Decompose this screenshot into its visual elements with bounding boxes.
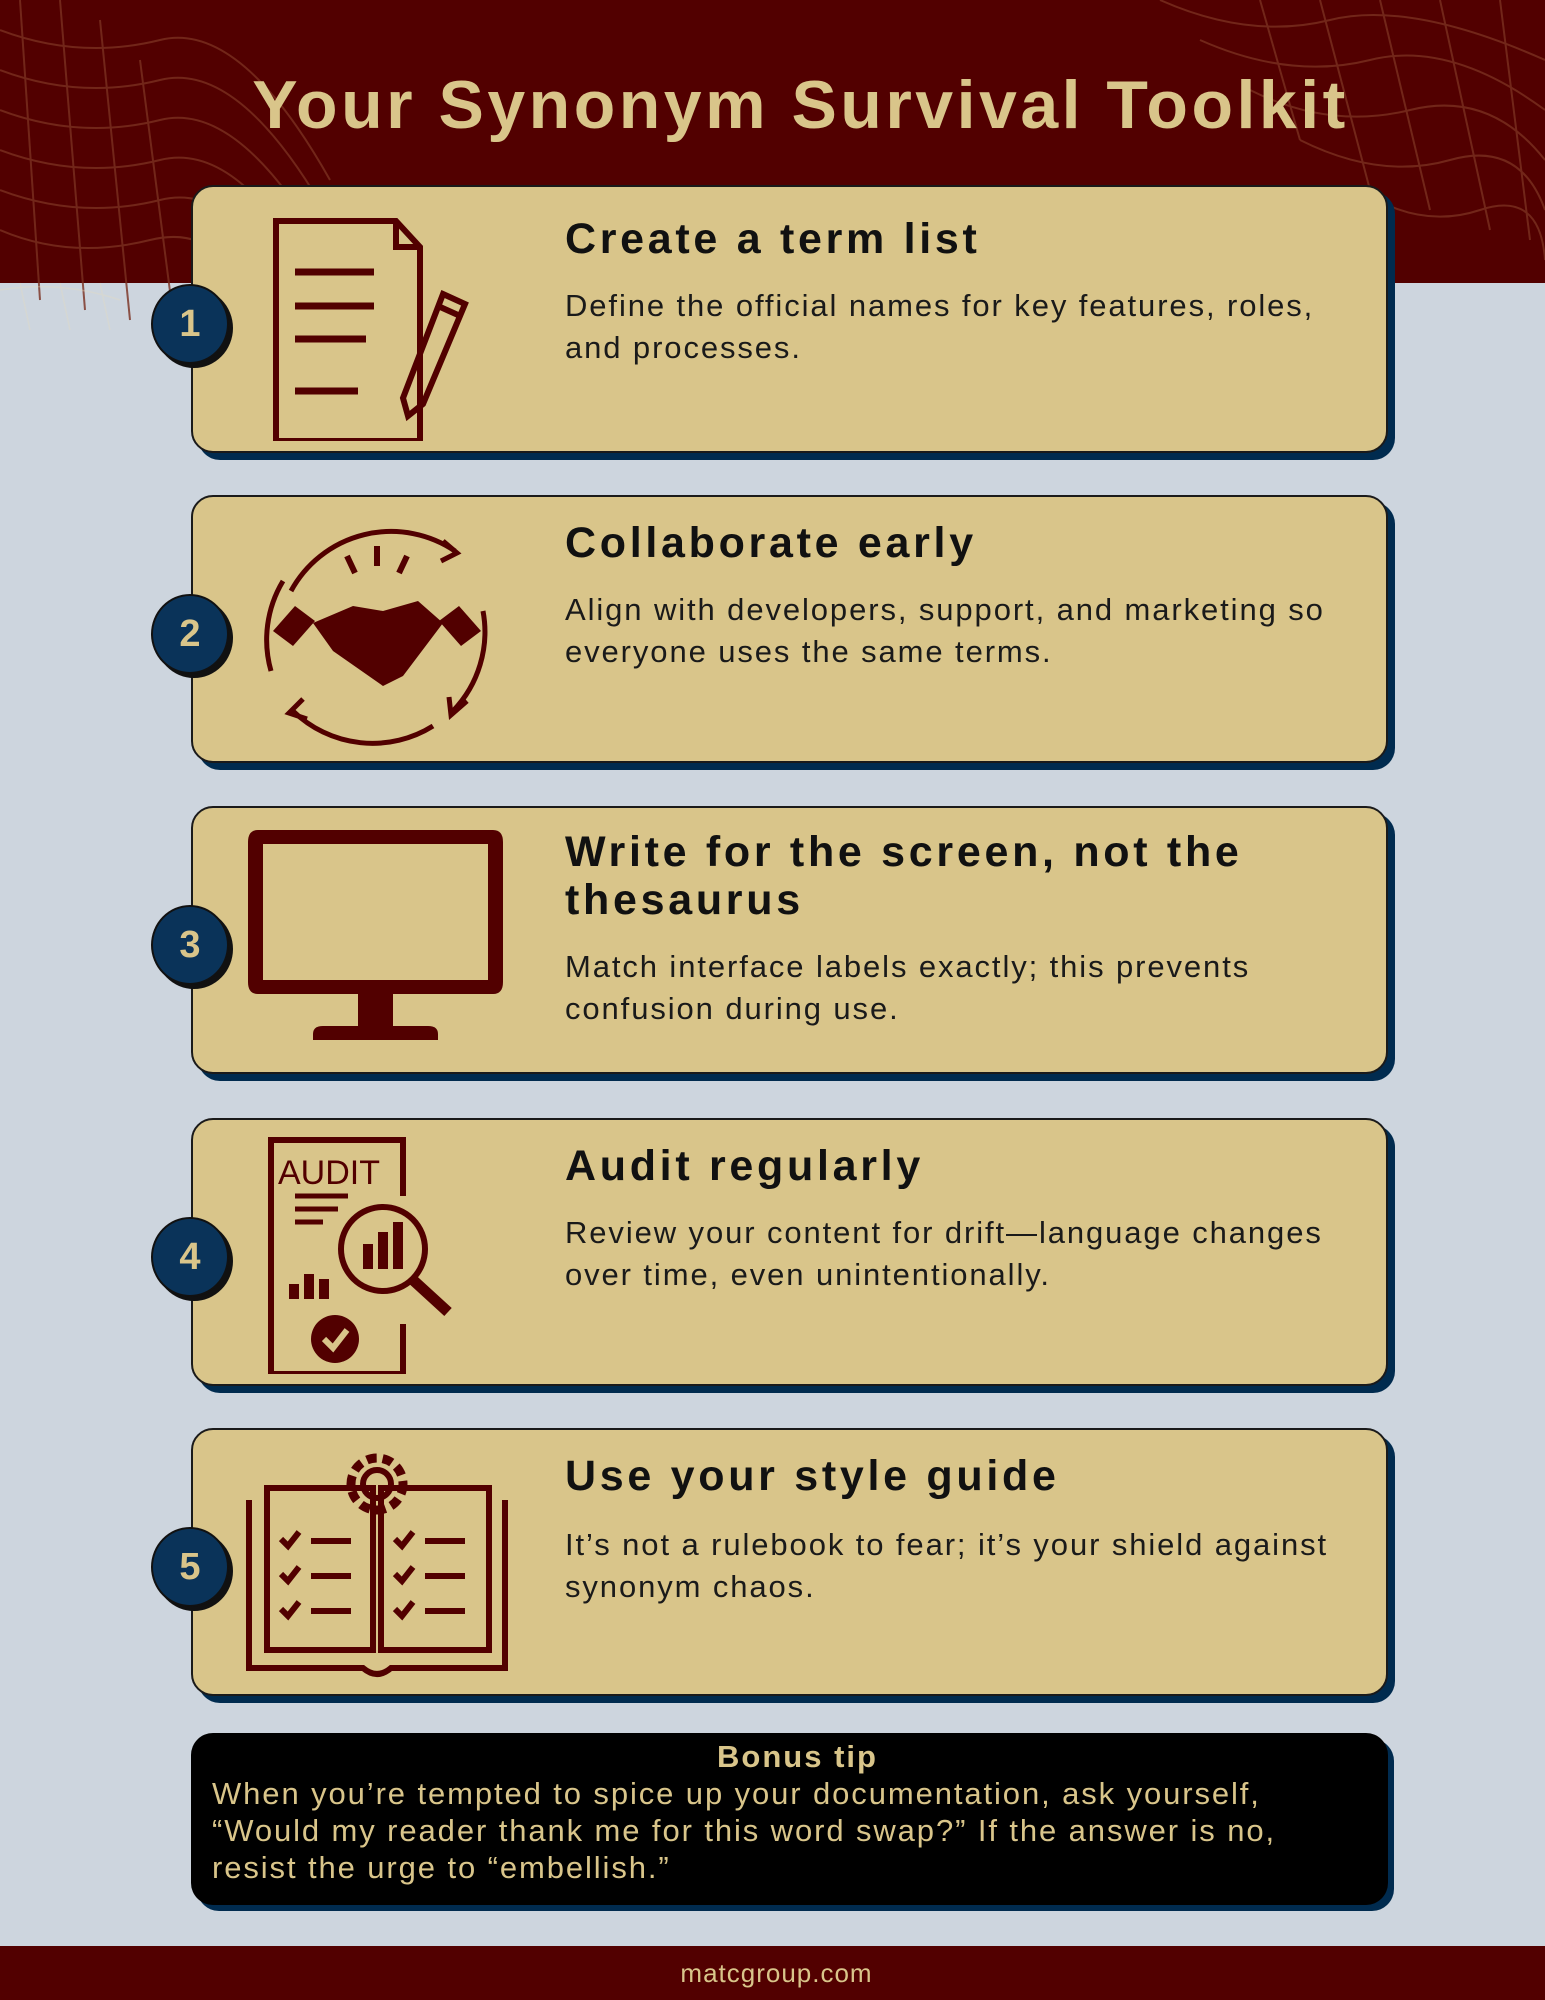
text (565, 288, 1314, 365)
heading: Write for the screen, not the (565, 828, 1243, 876)
text (565, 949, 1250, 1026)
footer: matcgroup.com (680, 1958, 873, 1988)
icon: audit report (268, 1137, 452, 1374)
card 5 (191, 1428, 1388, 1696)
bonus text: “Would my reader thank me for this word swap?” If the answer is no, (212, 1813, 1276, 1848)
number badge 2 (151, 594, 229, 674)
heading: Audit regularly (565, 1142, 924, 1190)
number badge 5 (151, 1527, 229, 1607)
bonus tip box (191, 1733, 1388, 1905)
card 3 (191, 806, 1388, 1074)
text (565, 1527, 1328, 1604)
number badge 4 (151, 1217, 229, 1297)
text: over time, even unintentionally. (565, 1257, 1051, 1292)
bonus text (212, 1776, 1276, 1885)
icon: audit report: AUDIT (278, 1154, 380, 1192)
number badge 1: 1 (179, 303, 201, 345)
number badge 2: 2 (179, 613, 201, 655)
header band (0, 0, 1545, 283)
text: Review your content for drift—language changes (565, 1215, 1323, 1250)
text: synonym chaos. (565, 1569, 816, 1604)
icon: document with pencil (273, 218, 469, 441)
text (565, 592, 1325, 669)
card 4 (191, 1118, 1388, 1386)
card 2 (191, 495, 1388, 763)
number badge 4: 4 (179, 1236, 201, 1278)
icon: monitor (248, 830, 503, 1040)
text: everyone uses the same terms. (565, 634, 1053, 669)
bonus text: resist the urge to “embellish.” (212, 1850, 671, 1885)
card 1 (191, 185, 1388, 453)
heading: Collaborate early (565, 519, 977, 567)
text: Match interface labels exactly; this prevents (565, 949, 1250, 984)
icon: open book with gear and checklists (246, 1454, 508, 1678)
text: confusion during use. (565, 991, 900, 1026)
number badge 3 (151, 905, 229, 985)
number badge 1 (151, 284, 229, 364)
text: Define the official names for key features, roles, (565, 288, 1314, 323)
bonus text: When you’re tempted to spice up your documentation, ask yourself, (212, 1776, 1261, 1811)
text: Align with developers, support, and marketing so (565, 592, 1325, 627)
heading: thesaurus (565, 876, 804, 924)
bonus heading: Bonus tip (717, 1739, 878, 1774)
icon: handshake with cycle (264, 528, 488, 746)
heading (565, 828, 1243, 924)
text: and processes. (565, 330, 802, 365)
number badge 3: 3 (179, 924, 201, 966)
text (565, 1215, 1323, 1292)
footer (0, 1946, 1545, 2000)
decorative mesh (0, 0, 1545, 330)
title: Your Synonym Survival Toolkit (252, 67, 1349, 143)
text: It’s not a rulebook to fear; it’s your shield against (565, 1527, 1328, 1562)
heading: Use your style guide (565, 1452, 1060, 1500)
heading: Create a term list (565, 215, 981, 263)
number badge 5: 5 (179, 1546, 201, 1588)
